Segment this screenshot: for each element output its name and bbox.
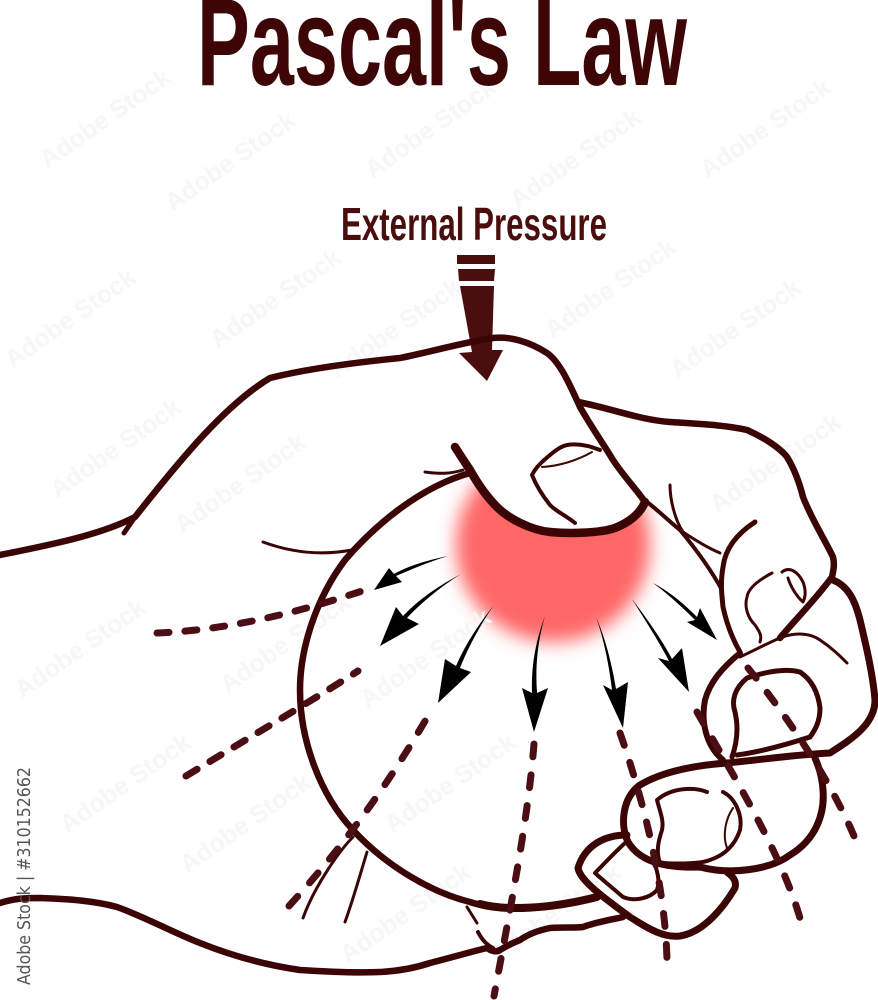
finger loop	[782, 570, 805, 602]
watermark pattern: Adobe Stock	[335, 858, 476, 969]
arrow 1	[374, 556, 448, 590]
thumb nail	[532, 444, 600, 523]
index finger curve	[721, 522, 755, 652]
watermark pattern: Adobe Stock	[215, 588, 356, 699]
finger detail	[746, 573, 772, 642]
wrist wrinkle one	[303, 837, 353, 918]
ball top left line	[425, 470, 463, 473]
watermark pattern: Adobe Stock	[485, 858, 626, 969]
watermark pattern: Adobe Stock	[205, 243, 346, 354]
watermark pattern: Adobe Stock	[45, 393, 186, 504]
arrow 2	[380, 574, 461, 646]
stock id: Adobe Stock | #310152662	[14, 767, 35, 985]
back of fingers	[578, 402, 834, 638]
watermark pattern: Adobe Stock	[695, 73, 836, 184]
lower hand	[0, 898, 623, 972]
ball	[300, 473, 597, 908]
arrow 3	[438, 605, 494, 703]
wrist notch	[124, 517, 135, 533]
arrow 5	[596, 617, 628, 728]
watermark pattern: Adobe Stock	[325, 273, 466, 384]
arrow 6	[632, 599, 689, 692]
back of hand and thumb	[0, 338, 645, 555]
pressure glow	[456, 448, 650, 642]
watermark pattern: Adobe Stock	[355, 603, 496, 714]
middle finger top	[740, 634, 847, 663]
wrist crease	[263, 542, 352, 553]
wrist wrinkle two	[345, 852, 367, 922]
arrow 7	[653, 583, 717, 640]
watermark pattern: Adobe Stock	[705, 408, 846, 519]
force arrows	[374, 556, 717, 732]
watermark pattern: Adobe Stock	[540, 233, 681, 344]
watermark pattern: Adobe Stock	[0, 263, 141, 374]
arrow 4	[522, 616, 548, 732]
nail line	[725, 808, 733, 848]
ring fingernail	[657, 789, 741, 864]
arrow: external pressure	[457, 255, 503, 381]
ball right edge	[647, 502, 722, 590]
dashed force lines	[157, 589, 854, 996]
crease near ball	[670, 485, 720, 553]
ball bottom thick edge	[480, 897, 597, 908]
crease at palm base	[467, 907, 477, 923]
watermark pattern: Adobe Stock	[505, 103, 646, 214]
ring finger	[624, 580, 875, 871]
watermark pattern: Adobe Stock	[380, 728, 521, 839]
watermark pattern: Adobe Stock	[360, 73, 501, 184]
watermark pattern: Adobe Stock	[10, 593, 151, 704]
crease at palm base lower	[478, 932, 493, 948]
nail line	[542, 452, 592, 467]
label: external pressure: External Pressure	[341, 198, 607, 250]
watermark pattern: Adobe Stock	[175, 768, 316, 879]
middle fingernail	[732, 670, 820, 757]
watermark pattern: Adobe Stock	[55, 728, 196, 839]
watermark pattern: Adobe Stock	[35, 63, 176, 174]
thumb mask over glow	[300, 380, 700, 533]
watermark pattern: Adobe Stock	[170, 428, 311, 539]
little fingernail	[595, 843, 658, 899]
little finger	[578, 835, 735, 936]
thumb underside	[455, 447, 645, 533]
watermark pattern: Adobe Stock	[160, 106, 301, 217]
hand outline	[0, 338, 875, 972]
watermark pattern: Adobe Stock	[665, 273, 806, 384]
middle fingertip	[704, 653, 740, 760]
